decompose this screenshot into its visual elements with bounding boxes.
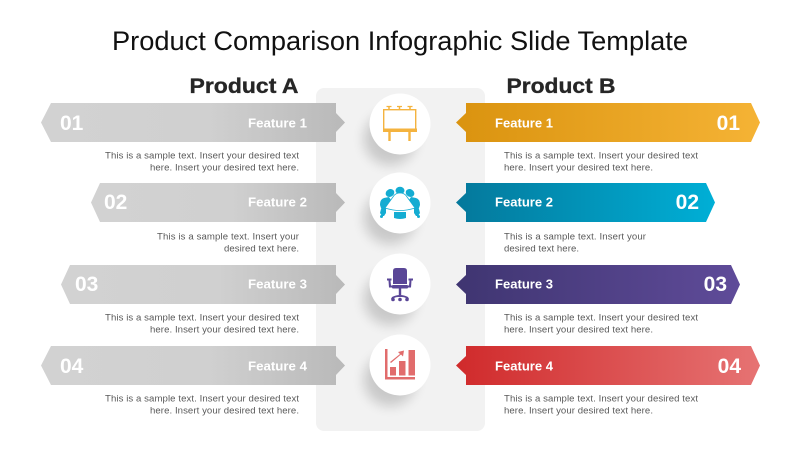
number B3: 03 xyxy=(704,273,727,296)
number A3: 03 xyxy=(75,273,98,296)
description B1: here. Insert your desired text here. xyxy=(504,162,653,174)
Product B feature 3 xyxy=(456,265,740,336)
label A1: Feature 1 xyxy=(248,116,307,130)
label A3: Feature 3 xyxy=(248,278,307,292)
description A2: This is a sample text. Insert your xyxy=(157,232,300,242)
number B4: 04 xyxy=(718,355,741,378)
description A1: This is a sample text. Insert your desired text xyxy=(105,150,299,162)
icon circle: conference table xyxy=(364,172,430,244)
number A4: 04 xyxy=(60,355,84,378)
arrow banner A3 xyxy=(61,265,345,304)
Product B feature 2 xyxy=(456,183,715,254)
number B1: 01 xyxy=(717,112,740,135)
description A4: here. Insert your desired text here. xyxy=(150,406,299,416)
description A3: here. Insert your desired text here. xyxy=(150,324,299,336)
Product A feature 4 xyxy=(41,346,345,416)
arrow banner B4 xyxy=(456,346,760,385)
center panel xyxy=(316,88,485,431)
label A2: Feature 2 xyxy=(248,196,307,210)
description B4: here. Insert your desired text here. xyxy=(504,406,653,416)
description B3: This is a sample text. Insert your desired text xyxy=(504,312,698,324)
Product A feature 2 xyxy=(91,183,345,254)
description B1: This is a sample text. Insert your desired text xyxy=(504,150,698,162)
description A1: here. Insert your desired text here. xyxy=(150,162,299,174)
arrow banner B3 xyxy=(456,265,740,304)
number B2: 02 xyxy=(676,191,699,214)
label B4: Feature 4 xyxy=(495,360,553,374)
icon circle: office chair xyxy=(364,254,430,325)
description B3: here. Insert your desired text here. xyxy=(504,324,653,336)
label A4: Feature 4 xyxy=(248,360,307,374)
icon circle: billboard xyxy=(364,94,430,165)
arrow banner A2 xyxy=(91,183,345,222)
Product B feature 1 xyxy=(456,103,760,174)
Product A feature 1 xyxy=(41,103,345,174)
description A4: This is a sample text. Insert your desired text xyxy=(105,394,299,404)
label B1: Feature 1 xyxy=(495,116,553,130)
arrow banner A1 xyxy=(41,103,345,142)
title: Product Comparison Infographic Slide Template xyxy=(112,26,688,56)
icon circle: growth chart xyxy=(364,334,430,406)
description A3: This is a sample text. Insert your desired text xyxy=(105,312,299,324)
description B4: This is a sample text. Insert your desired text xyxy=(504,394,698,404)
Product B feature 4 xyxy=(456,346,760,416)
description A2: desired text here. xyxy=(224,244,299,254)
arrow banner A4 xyxy=(41,346,345,385)
arrow banner B1 xyxy=(456,103,760,142)
Product A feature 3 xyxy=(61,265,345,336)
number A1: 01 xyxy=(60,112,84,135)
heading: Product B: Product B xyxy=(506,75,616,98)
description B2: desired text here. xyxy=(504,244,579,254)
arrow banner B2 xyxy=(456,183,715,222)
description B2: This is a sample text. Insert your xyxy=(504,232,647,242)
label B2: Feature 2 xyxy=(495,196,553,210)
label B3: Feature 3 xyxy=(495,278,553,292)
number A2: 02 xyxy=(104,191,127,214)
heading: Product A: Product A xyxy=(190,75,298,98)
